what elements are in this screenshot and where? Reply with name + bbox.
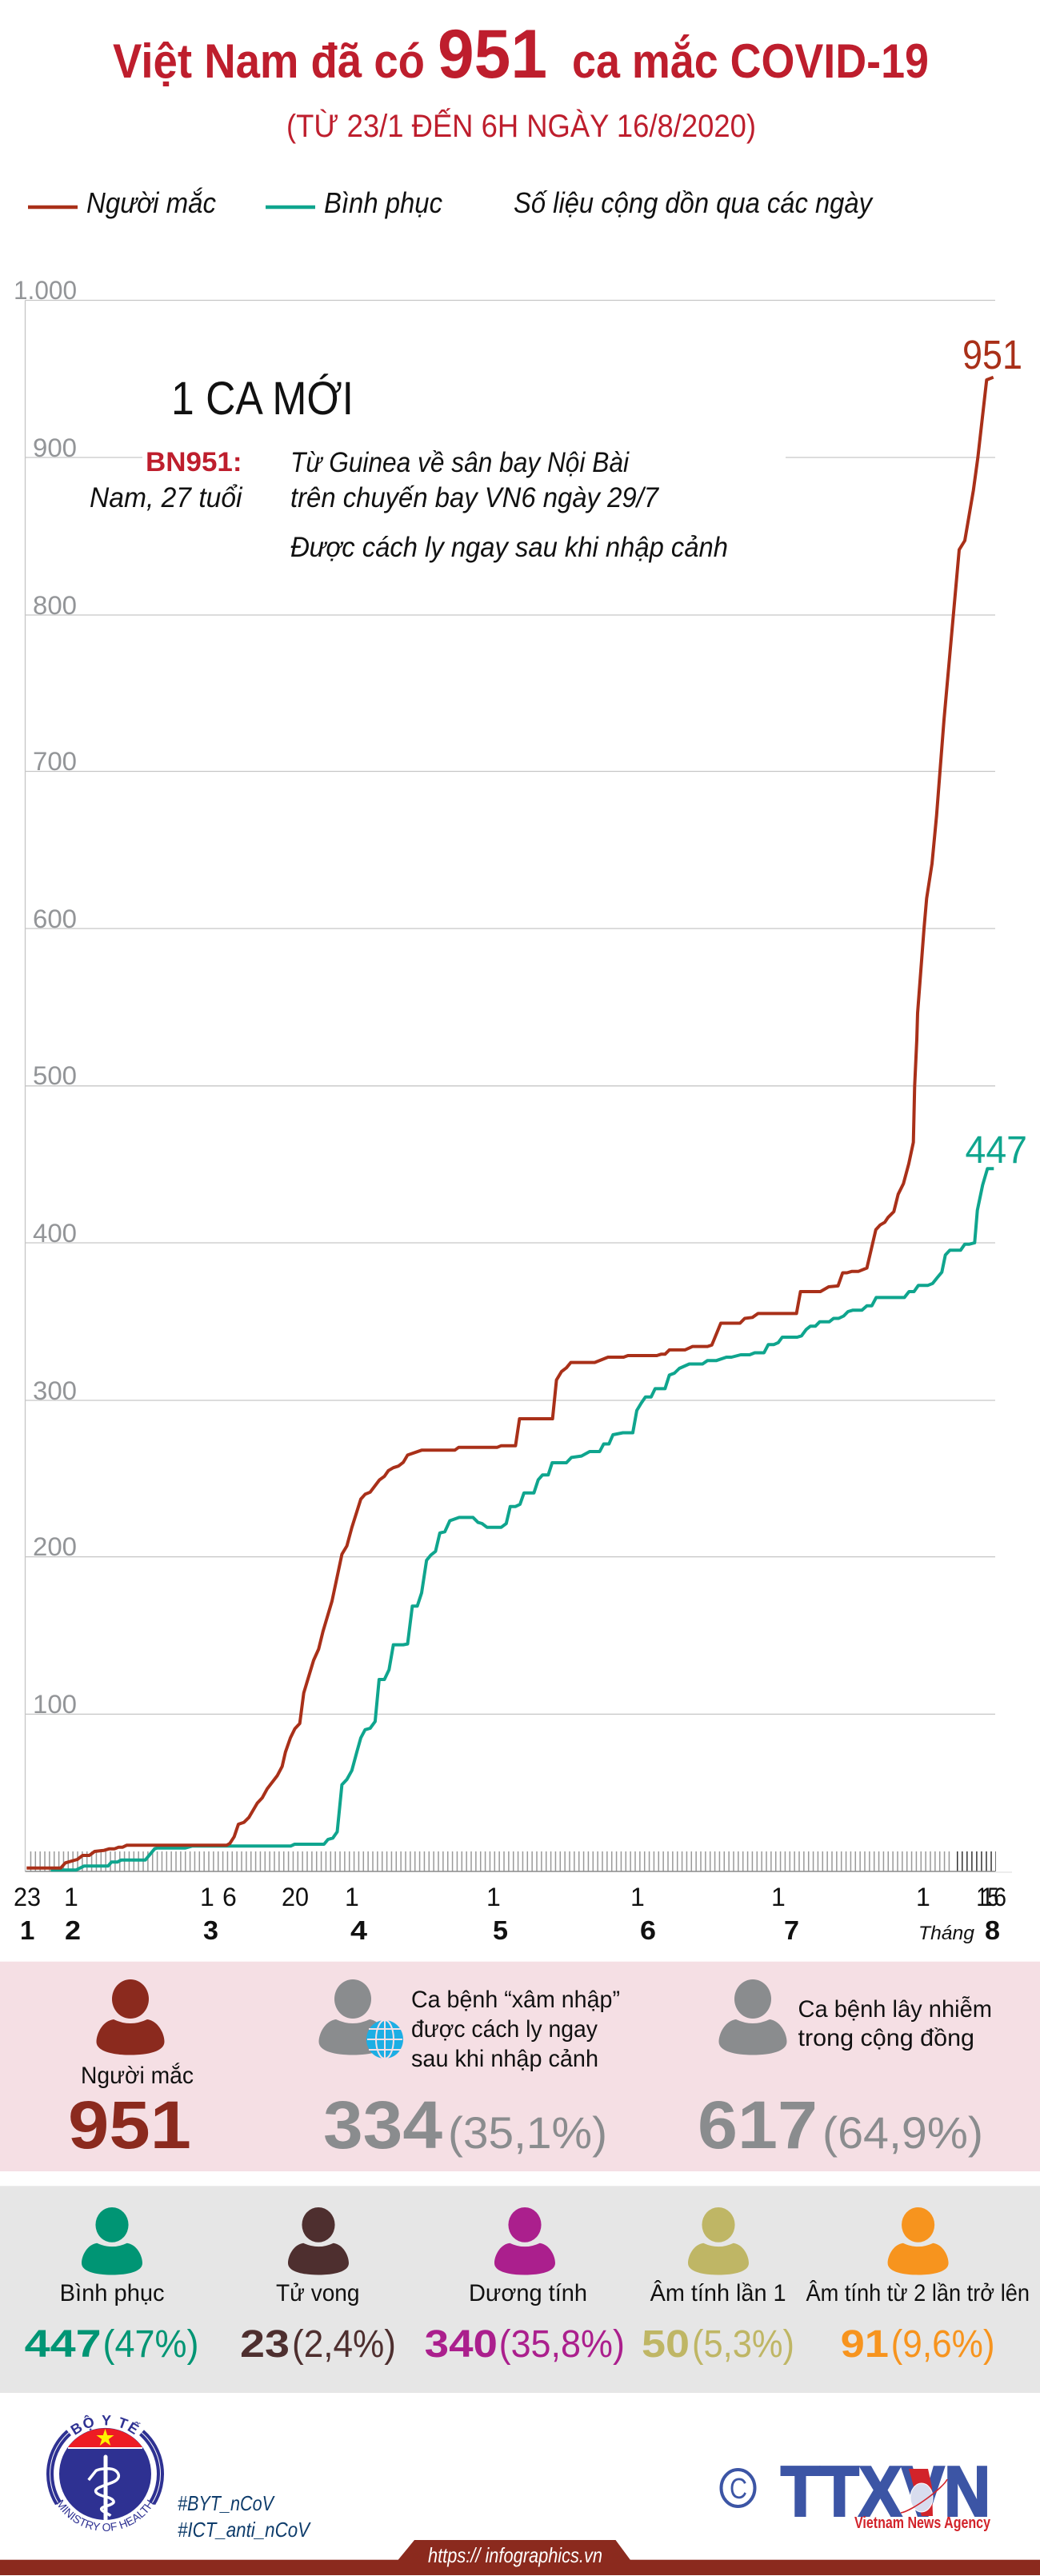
y axis and gridlines	[26, 301, 1012, 1872]
status: recovered: Bình phục	[60, 2280, 165, 2306]
y axis labels: 800	[33, 591, 77, 620]
panel: case totals	[0, 1962, 1040, 2171]
logo: Ministry of Health: BỘ Y TẾ	[70, 2415, 141, 2435]
case details	[290, 447, 728, 563]
end label: 447: 447	[965, 1129, 1027, 1172]
legend	[28, 186, 874, 219]
agency name: Vietnam News Agency	[854, 2514, 991, 2532]
number: 334: (35,1%)	[448, 2107, 607, 2158]
x axis unit: Tháng	[918, 1923, 975, 1944]
icon: community case person	[718, 1979, 787, 2055]
status: deaths: 23	[240, 2323, 290, 2366]
hashtags	[178, 2491, 311, 2542]
x axis month labels: 4	[350, 1915, 368, 1945]
y axis labels: 500	[33, 1061, 77, 1090]
status: negative once: (5,3%)	[692, 2323, 794, 2366]
x axis month labels: 6	[640, 1915, 656, 1945]
status: positive: 340	[425, 2323, 498, 2366]
status: positive: Dương tính	[469, 2280, 587, 2306]
x axis month labels: 3	[203, 1915, 218, 1945]
end label: 951: 951	[962, 332, 1022, 377]
x axis day labels: 15	[976, 1883, 998, 1911]
status: negative twice or more: 91	[841, 2323, 889, 2366]
x axis day labels: 16	[981, 1883, 1006, 1911]
status: positive	[425, 2207, 625, 2366]
icon: infected person	[96, 1979, 165, 2055]
title: ca mắc COVID-19	[572, 34, 929, 88]
y axis labels: 300	[33, 1376, 77, 1405]
x axis day labels: 6	[222, 1883, 237, 1911]
icon: imported case person	[318, 1979, 387, 2055]
case details: trên chuyến bay VN6 ngày 29/7	[290, 482, 659, 513]
legend: Bình phục: Bình phục	[324, 186, 442, 219]
x axis month labels: 2	[65, 1915, 81, 1945]
status: deaths	[240, 2207, 396, 2366]
title	[113, 16, 929, 93]
status: recovered	[25, 2207, 199, 2366]
y axis labels: 700	[33, 747, 77, 776]
y axis labels: 600	[33, 905, 77, 933]
line chart	[14, 276, 1027, 1945]
y axis labels	[14, 276, 77, 1719]
number: 334	[323, 2087, 607, 2163]
x axis day labels: 20	[282, 1883, 309, 1911]
number: 617: 617	[698, 2087, 818, 2163]
x axis day labels: 1	[345, 1883, 359, 1911]
callout: new case	[90, 373, 728, 563]
icon: copyright: C	[730, 2472, 747, 2505]
status: recovered: (47%)	[102, 2323, 198, 2366]
y axis labels: 900	[33, 433, 77, 462]
patient info: Nam, 27 tuổi	[90, 482, 243, 513]
x axis day labels: 1	[486, 1883, 501, 1911]
y axis labels: 400	[33, 1219, 77, 1248]
label: community cases: Ca bệnh lây nhiễm	[798, 1996, 992, 2023]
x axis day labels: 23	[14, 1883, 41, 1911]
number: 617	[698, 2087, 983, 2163]
y axis labels: 100	[33, 1690, 77, 1719]
x axis day labels: 1	[64, 1883, 78, 1911]
case details: Từ Guinea về sân bay Nội Bài	[290, 447, 630, 478]
case details: Được cách ly ngay sau khi nhập cảnh	[290, 532, 728, 563]
status: negative once: 50	[642, 2323, 690, 2366]
status: negative twice or more: (9,6%)	[891, 2323, 995, 2366]
label: community cases: trong cộng đồng	[798, 2025, 974, 2051]
callout heading: 1 CA MỚI	[171, 373, 354, 425]
status: negative twice or more	[806, 2207, 1030, 2366]
icon: copyright	[722, 2470, 755, 2506]
footer bar	[0, 2540, 1040, 2575]
subtitle: (TỪ 23/1 ĐẾN 6H NGÀY 16/8/2020)	[286, 107, 756, 144]
recovered line	[50, 1168, 994, 1870]
x axis month labels: 5	[493, 1915, 508, 1945]
label: imported cases: sau khi nhập cảnh	[411, 2046, 598, 2072]
footer url: https:// infographics.vn	[428, 2543, 602, 2567]
title: Việt Nam đã có	[113, 34, 425, 88]
x axis month labels	[20, 1915, 1000, 1945]
label: infected: Người mắc	[81, 2063, 194, 2089]
status: deaths: (2,4%)	[292, 2323, 396, 2366]
logo: Ministry of Health	[46, 2415, 164, 2531]
label: imported cases: được cách ly ngay	[411, 2016, 598, 2043]
label: community cases	[798, 1996, 992, 2051]
panel: patient status	[0, 2186, 1040, 2393]
status: negative once	[642, 2207, 794, 2366]
x axis month labels: 8	[985, 1915, 1000, 1945]
label: imported cases	[411, 1987, 620, 2072]
day ticks	[26, 1862, 996, 1871]
label: imported cases: Ca bệnh “xâm nhập”	[411, 1987, 620, 2013]
x axis month labels: 1	[20, 1915, 34, 1945]
x axis day labels: 1	[630, 1883, 645, 1911]
x axis day labels	[14, 1883, 1006, 1911]
x axis day labels: 1	[916, 1883, 930, 1911]
title: 951	[438, 16, 547, 93]
status: recovered: 447	[25, 2323, 102, 2366]
y axis labels: 1.000	[14, 276, 77, 305]
x axis day labels: 1	[200, 1883, 214, 1911]
number: 617: (64,9%)	[822, 2107, 983, 2158]
hashtags: #BYT_nCoV	[178, 2491, 275, 2515]
x axis month labels: 7	[784, 1915, 799, 1945]
hashtags: #ICT_anti_nCoV	[178, 2518, 311, 2542]
y axis labels: 200	[33, 1532, 77, 1561]
legend note: Số liệu cộng dồn qua các ngày	[514, 186, 874, 219]
number: 951: 951	[68, 2087, 191, 2163]
status: positive: (35,8%)	[499, 2323, 625, 2366]
infected line	[26, 377, 994, 1868]
logo: Ministry of Health: MINISTRY OF HEALTH	[56, 2499, 154, 2531]
patient id: BN951:	[146, 447, 242, 477]
number: 334: 334	[323, 2087, 442, 2163]
legend: Người mắc: Người mắc	[86, 186, 216, 219]
status: negative once: Âm tính lần 1	[650, 2280, 786, 2306]
logo: TTXVN: TTXVN	[781, 2452, 990, 2530]
x axis day labels: 1	[771, 1883, 786, 1911]
icon: globe	[366, 2020, 403, 2059]
status: deaths: Tử vong	[276, 2280, 360, 2306]
